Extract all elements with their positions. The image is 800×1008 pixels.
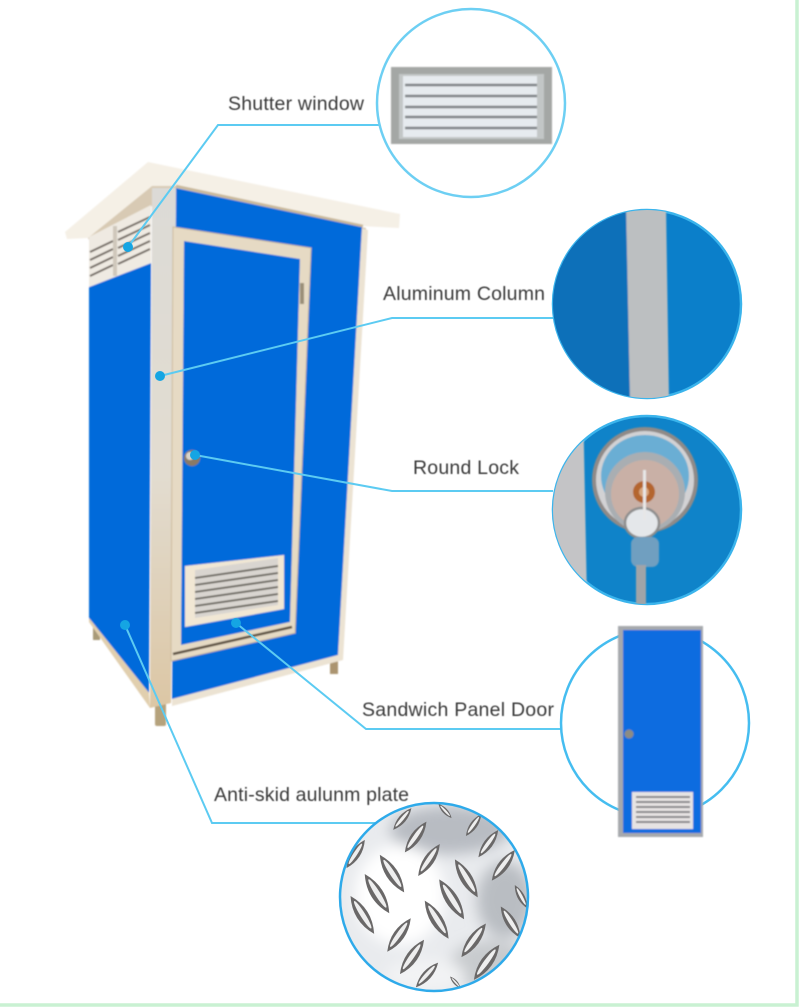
front wall panel <box>172 186 368 706</box>
door lock <box>184 450 200 466</box>
leader line: round lock <box>195 455 553 491</box>
label: shutter window: Shutter window <box>228 93 365 115</box>
callout: anti-skid plate <box>120 620 535 998</box>
circle: round lock detail <box>550 400 741 605</box>
door threshold gap <box>173 627 292 654</box>
diamond plate texture <box>346 804 527 988</box>
label: aluminum column: Aluminum Column <box>383 283 545 305</box>
callout: aluminum column <box>155 205 741 400</box>
label: sandwich panel door: Sandwich Panel Door <box>362 699 554 721</box>
circle: aluminum column detail <box>550 205 741 400</box>
left wall panel <box>89 263 151 693</box>
column close-up <box>550 205 669 400</box>
shutter frame <box>391 67 552 144</box>
leader line: anti-skid plate <box>125 625 375 823</box>
aluminum corner column <box>150 188 176 708</box>
marker dot: aluminum column <box>155 371 165 381</box>
bottom cabin trim <box>89 618 150 708</box>
callout: shutter window <box>123 9 565 252</box>
marker dot: sandwich panel door <box>231 618 241 628</box>
circle: anti-skid plate detail <box>335 798 535 998</box>
callout: sandwich panel door <box>231 618 749 837</box>
leader line: aluminum column <box>160 318 553 376</box>
callout: round lock <box>190 400 741 605</box>
marker dot: anti-skid plate <box>120 620 130 630</box>
door hinge <box>300 283 304 304</box>
door vent <box>185 555 284 627</box>
marker dot: shutter window <box>123 242 133 252</box>
door close-up <box>618 626 703 837</box>
portable toilet cabin <box>65 162 400 726</box>
circle: shutter window detail <box>377 9 565 197</box>
lock close-up <box>553 426 699 604</box>
leader line: sandwich panel door <box>236 623 562 729</box>
door <box>171 227 311 661</box>
label: anti-skid plate: Anti-skid aulunm plate <box>214 784 409 806</box>
circle: sandwich panel door detail <box>561 626 749 837</box>
label: round lock: Round Lock <box>413 457 519 479</box>
roof <box>65 162 400 240</box>
marker dot: round lock <box>190 450 200 460</box>
plate circle outline <box>340 803 528 991</box>
cabin legs <box>93 626 338 726</box>
door frame <box>171 227 311 661</box>
leader line: shutter window <box>128 125 385 247</box>
door blue panel <box>181 241 300 645</box>
left wall vent <box>89 205 151 287</box>
